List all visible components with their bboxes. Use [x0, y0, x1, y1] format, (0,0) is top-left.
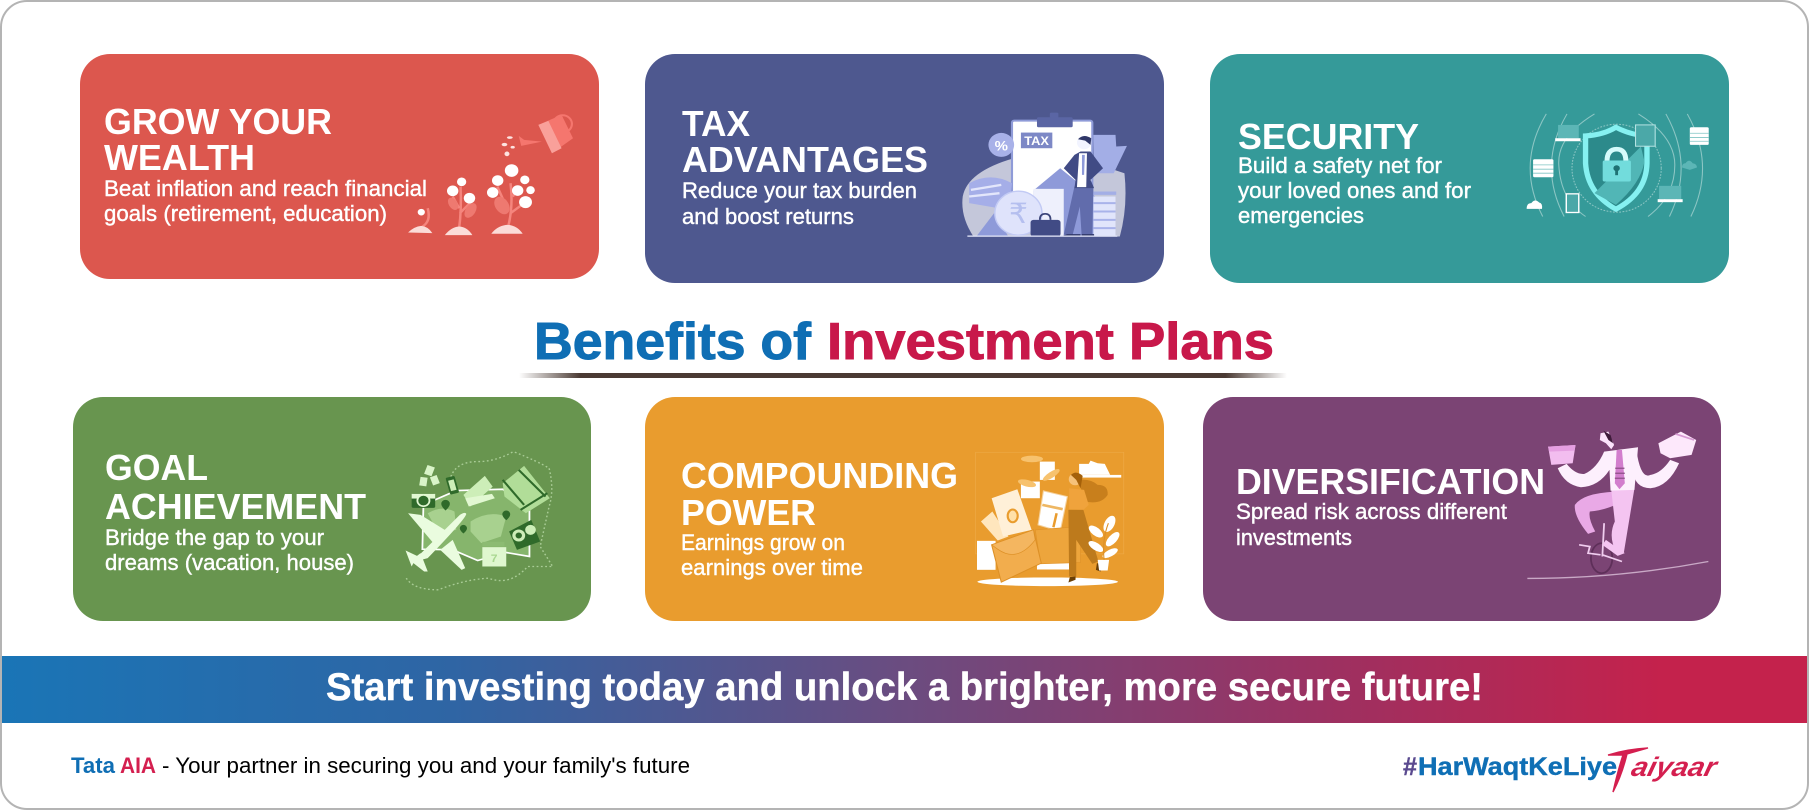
icon: watering can and growing plants: [408, 115, 573, 235]
title: Benefits of: [534, 313, 812, 371]
title: [534, 313, 1274, 371]
text: goal achievement description: dreams (vacation, house): [105, 550, 354, 575]
icon: tax clipboard, coin and businessman: %: [995, 139, 1008, 154]
hashtag logo: [1403, 748, 1722, 792]
icon: tax clipboard, coin and businessman: [962, 113, 1127, 237]
call-to-action banner: [2, 656, 1807, 723]
heading: tax advantages: ADVANTAGES: [682, 139, 928, 180]
panel: security: [1210, 54, 1729, 283]
icon: travel map, plane and luggage: [406, 452, 553, 590]
text: tax advantages description: [682, 178, 917, 229]
heading: goal achievement: [105, 447, 366, 527]
text: tax advantages description: Reduce your tax burden: [682, 178, 917, 203]
icon: wallet, cash, coins and woman: [976, 452, 1124, 586]
hashtag logo: HarWaqtKeLiye: [1418, 753, 1617, 781]
panel: grow your wealth: [80, 54, 599, 279]
heading: grow your wealth: WEALTH: [104, 137, 255, 178]
heading: grow your wealth: GROW YOUR: [104, 101, 332, 142]
heading: diversification: DIVERSIFICATION: [1236, 461, 1545, 502]
title: Investment Plans: [827, 313, 1274, 371]
text: grow your wealth description: goals (retirement, education): [104, 201, 387, 226]
heading: compounding power: COMPOUNDING: [681, 455, 958, 496]
text: goal achievement description: Bridge the gap to your: [105, 525, 324, 550]
panel: diversification: [1203, 397, 1721, 621]
heading: security: SECURITY: [1238, 116, 1419, 157]
panel: tax advantages: [645, 54, 1164, 283]
text: compounding power description: [681, 530, 863, 580]
footer tagline: Tata: [71, 753, 116, 778]
text: diversification description: investments: [1236, 525, 1352, 550]
footer tagline: AIA: [120, 753, 156, 778]
heading: compounding power: POWER: [681, 492, 816, 533]
hashtag logo: aiyaar: [1629, 751, 1722, 782]
text: goal achievement description: [105, 525, 354, 575]
text: grow your wealth description: [104, 176, 427, 226]
call-to-action banner: Start investing today and unlock a brighter, more secure future!: [326, 666, 1483, 709]
heading: goal achievement: ACHIEVEMENT: [105, 486, 366, 527]
text: grow your wealth description: Beat inflation and reach financial: [104, 176, 427, 201]
heading: grow your wealth: [104, 101, 332, 178]
icon: travel map, plane and luggage: 7: [491, 552, 497, 565]
icon: unicyclist balancing boxes on tightrope: [1527, 431, 1708, 578]
text: security description: emergencies: [1238, 203, 1364, 228]
panel: goal achievement: [73, 397, 591, 621]
text: diversification description: [1236, 499, 1507, 550]
text: diversification description: Spread risk across different: [1236, 499, 1507, 524]
title underline: [519, 373, 1287, 378]
panel: compounding power: [645, 397, 1164, 621]
text: security description: [1238, 153, 1471, 228]
heading: tax advantages: [682, 103, 928, 180]
heading: goal achievement: GOAL: [105, 447, 208, 488]
text: tax advantages description: and boost returns: [682, 204, 854, 229]
icon: security shield with padlock and devices: [1527, 114, 1709, 216]
text: security description: Build a safety net for: [1238, 153, 1442, 178]
footer tagline: - Your partner in securing you and your family's future: [162, 753, 690, 778]
hashtag logo: #: [1403, 753, 1417, 781]
heading: tax advantages: TAX: [682, 103, 750, 144]
text: compounding power description: Earnings grow on: [681, 530, 845, 555]
icon: tax clipboard, coin and businessman: TAX: [1024, 135, 1050, 148]
text: compounding power description: earnings over time: [681, 555, 863, 580]
heading: compounding power: [681, 455, 958, 533]
text: security description: your loved ones and for: [1238, 178, 1471, 203]
icon: tax clipboard, coin and businessman: ₹: [1009, 199, 1028, 230]
